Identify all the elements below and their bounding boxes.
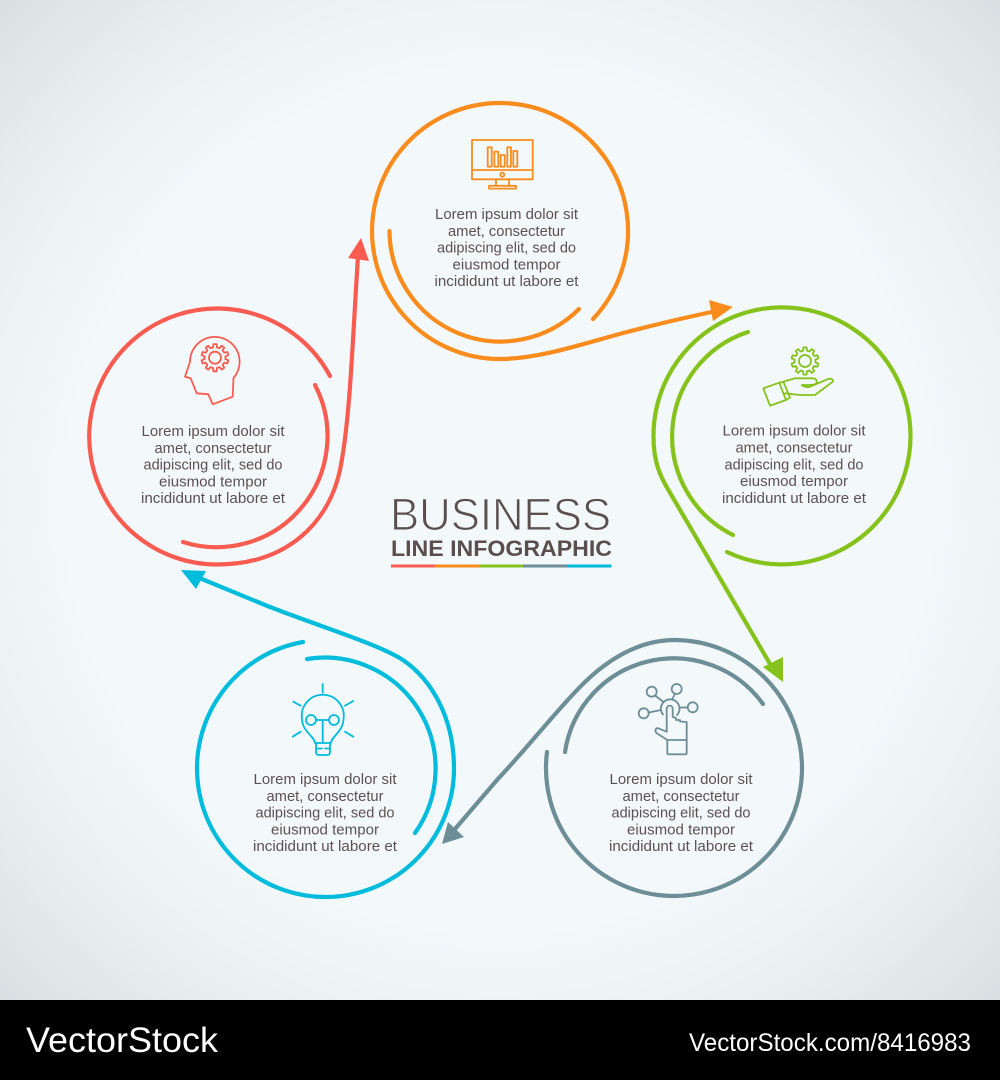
text block xyxy=(141,424,285,507)
title block xyxy=(390,489,612,568)
panel: red step xyxy=(89,238,369,564)
red circle with arrow xyxy=(89,238,369,564)
text block: Lorem ipsum dolor sit xyxy=(610,772,752,788)
text block: incididunt ut labore et xyxy=(141,491,285,507)
text block: eiusmod tempor xyxy=(159,474,267,490)
cyan circle with arrow xyxy=(181,570,454,897)
footer bar xyxy=(0,1000,1000,1080)
text block: amet, consectetur xyxy=(622,789,740,805)
text block xyxy=(434,207,578,290)
text block xyxy=(253,772,397,855)
text block: eiusmod tempor xyxy=(271,822,379,838)
text block: amet, consectetur xyxy=(448,224,565,240)
icon: monitor with bar chart xyxy=(472,140,533,189)
text block xyxy=(609,772,753,855)
text block: incididunt ut labore et xyxy=(722,491,866,507)
panel: orange step xyxy=(372,103,733,359)
icon: finger touching network xyxy=(639,684,698,754)
panel: gray step xyxy=(442,640,802,896)
text block: amet, consectetur xyxy=(154,441,272,457)
text block: incididunt ut labore et xyxy=(434,274,578,290)
text block: Lorem ipsum dolor sit xyxy=(254,772,396,788)
orange circle with arrow xyxy=(372,103,733,359)
text block: Lorem ipsum dolor sit xyxy=(142,424,284,440)
text block: Lorem ipsum dolor sit xyxy=(435,207,578,223)
icon: light bulb xyxy=(293,684,353,755)
text block: amet, consectetur xyxy=(736,441,853,457)
text block: adipiscing elit, sed do xyxy=(724,457,864,473)
panel: green step xyxy=(653,307,910,682)
text block: eiusmod tempor xyxy=(452,257,561,273)
text block: adipiscing elit, sed do xyxy=(256,806,394,822)
panel: cyan step xyxy=(181,570,454,897)
multicolour underline xyxy=(391,564,612,568)
text block: adipiscing elit, sed do xyxy=(144,458,282,474)
watermark url: VectorStock.com/8416983 xyxy=(689,1029,971,1057)
text block: Lorem ipsum dolor sit xyxy=(722,424,866,440)
text block: incididunt ut labore et xyxy=(609,839,753,855)
text block: adipiscing elit, sed do xyxy=(437,241,576,257)
text block: incididunt ut labore et xyxy=(253,839,397,855)
text block: adipiscing elit, sed do xyxy=(612,806,750,822)
text block: eiusmod tempor xyxy=(740,474,848,490)
icon: head with gear xyxy=(185,337,240,404)
green circle with arrow xyxy=(653,307,910,682)
icon: hand holding gear xyxy=(763,347,833,406)
title: BUSINESS: BUSINESS xyxy=(390,489,611,540)
text block xyxy=(722,424,866,507)
watermark brand: VectorStock xyxy=(26,1021,219,1060)
text block: eiusmod tempor xyxy=(627,822,735,838)
gray circle with arrow xyxy=(442,640,802,896)
text block: amet, consectetur xyxy=(266,789,384,805)
subtitle: LINE INFOGRAPHIC: LINE INFOGRAPHIC xyxy=(391,536,612,561)
